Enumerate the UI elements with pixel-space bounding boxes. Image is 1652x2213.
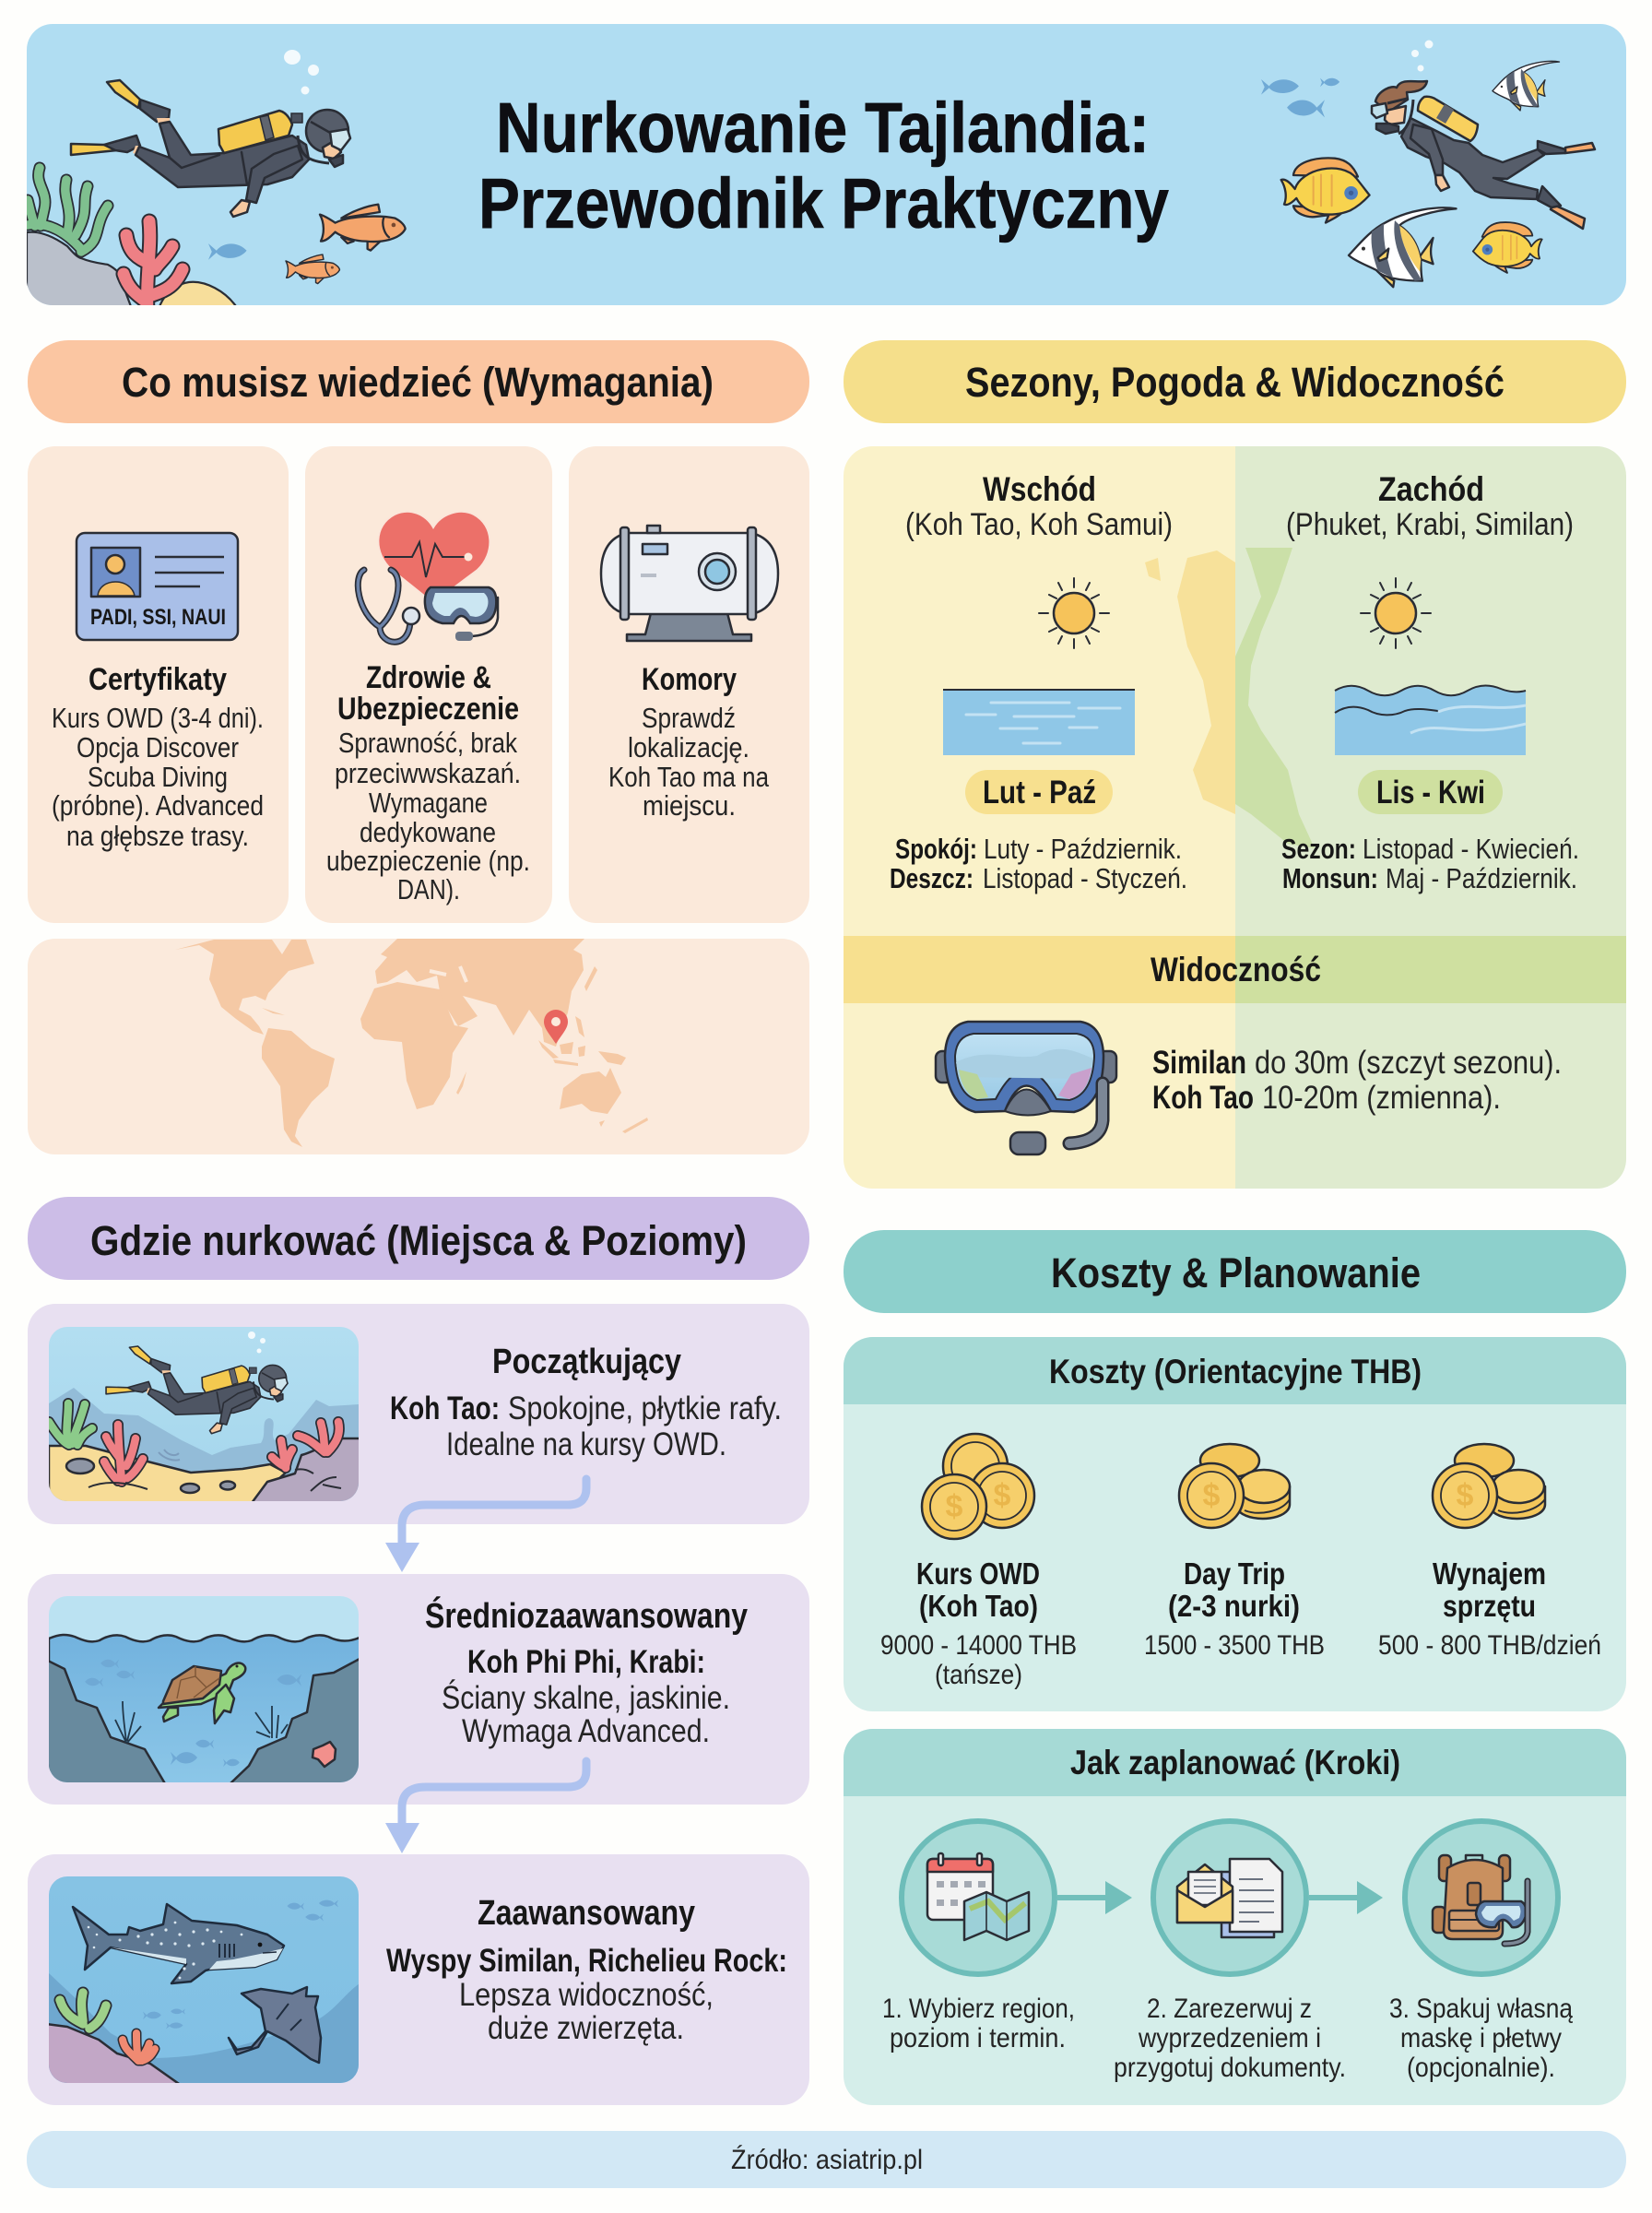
text: course cost: 9000 - 14000 THB [880,1630,1077,1661]
heading: where to dive: Gdzie nurkować (Miejsca & Poziomy) [90,1217,747,1264]
icon: coins day trip [1179,1444,1290,1528]
panel: certificates [28,446,289,923]
text: visibility: Koh Tao [1152,1080,1254,1116]
text: step 2: przygotuj dokumenty. [1114,2053,1346,2083]
text: day trip cost [1144,1556,1325,1661]
panel: seasons and visibility [844,446,1626,1189]
text: health: przeciwwskazań. [335,757,521,789]
badge: east season: Lut - Paź [983,775,1096,811]
text: visibility: Similan [1152,1045,1246,1081]
text: east details: Deszcz: [890,862,974,894]
text: advanced: Zaawansowany [478,1894,695,1933]
heading: costs and planning [844,1230,1626,1313]
text: certificates: Certyfikaty [88,662,227,697]
text: intermediate: Ściany skalne, jaskinie. [442,1679,730,1716]
icon: ID card [77,533,238,640]
icon: sun east [1039,578,1109,648]
text: step 1 [882,1994,1075,2053]
text: east: (Koh Tao, Koh Samui) [905,507,1173,542]
text: health: Wymagane [369,787,488,819]
text: visibility: do 30m (szczyt sezonu). [1255,1045,1562,1081]
text: beginner: Początkujący [492,1343,681,1381]
illustration: left reef and diver [27,41,1595,312]
text: chambers: miejscu. [643,789,736,822]
heading: where to dive [28,1197,809,1280]
text: step 1: 1. Wybierz region, [882,1994,1075,2024]
panel: planning steps [844,1729,1626,2105]
text: course cost: (tańsze) [935,1660,1022,1690]
text: certificates: Scuba Diving [88,761,228,793]
text: west: Zachód [1378,470,1484,508]
panel: advanced [28,1854,809,2105]
icon: step 2 envelope and documents [1153,1821,1306,1974]
text: west [1286,470,1574,542]
text: west details: Listopad - Kwiecień. [1363,833,1579,865]
text: rental cost: 500 - 800 THB/dzień [1378,1630,1601,1661]
text: certificates: (próbne). Advanced [52,789,264,822]
text: advanced: Lepsza widoczność, [459,1977,714,2013]
text: step 3: maskę i płetwy [1400,2023,1562,2053]
badge: west season: Lis - Kwi [1376,775,1485,811]
text: health: Zdrowie & [366,660,491,695]
panel: chambers [569,446,809,923]
icon: coins day trip: $ [1203,1478,1221,1513]
icon: header bubbles [284,41,1433,94]
icon: step 3 backpack and mask [1405,1821,1558,1974]
arrow: intermediate to advanced [385,1761,586,1853]
text: step 2 [1114,1994,1346,2083]
text: chambers: Sprawdź [642,702,736,734]
text: east details: Listopad - Styczeń. [983,862,1187,894]
icon: coins course: $ [994,1478,1011,1513]
text: step 3: (opcjonalnie). [1407,2053,1555,2083]
illustration: wall and turtle [46,1596,361,1785]
badge: west season [1358,770,1503,814]
header banner [27,24,1626,312]
text: visibility: 10-20m (zmienna). [1262,1080,1501,1116]
text: health: DAN). [397,873,460,905]
text: west details [1281,833,1579,894]
text: intermediate: Koh Phi Phi, Krabi: [467,1644,705,1680]
icon: coins course [922,1434,1034,1539]
arrow: step 2 to 3 [1309,1881,1383,1914]
text: west: (Phuket, Krabi, Similan) [1286,507,1574,542]
text: health: Sprawność, brak [338,727,517,759]
text: advanced: duże zwierzęta. [488,2010,684,2046]
panel: world map [28,939,809,1154]
heading: seasons [844,340,1626,423]
text: chambers: Komory [642,662,737,697]
text: step 3: 3. Spakuj własną [1389,1994,1573,2024]
text: intermediate: Średniozaawansowany [425,1595,748,1636]
illustration: shallow reef [49,1327,361,1503]
footer: source [27,2131,1626,2188]
heading: costs and planning: Koszty & Planowanie [1051,1249,1421,1296]
icon: coins rental [1433,1444,1545,1528]
text: course cost: (Koh Tao) [919,1589,1038,1623]
text: day trip cost: (2-3 nurki) [1168,1589,1300,1623]
heading: steps: Jak zaplanować (Kroki) [1070,1744,1400,1781]
heading: visibility: Widoczność [1150,951,1321,988]
illustration: calm water [943,689,1135,755]
text: rental cost: Wynajem [1433,1556,1546,1591]
icon: hyperbaric chamber [601,526,778,641]
text: advanced: Wyspy Similan, Richelieu Rock: [386,1943,787,1979]
text: beginner: Idealne na kursy OWD. [446,1426,726,1462]
icon: step 1 calendar and map [902,1821,1055,1974]
footer: source: Źródło: asiatrip.pl [731,2145,923,2175]
icon: ID card: PADI, SSI, NAUI [90,605,226,630]
text: health: ubezpieczenie (np. [326,845,530,877]
text: step 3 [1389,1994,1573,2083]
text: east details: Luty - Październik. [984,833,1182,865]
text: step 1: poziom i termin. [890,2023,1066,2053]
text: course cost [880,1556,1077,1690]
text: step 2: wyprzedzeniem i [1138,2023,1321,2053]
text: certificates [52,662,264,852]
text: certificates: Kurs OWD (3-4 dni). [52,702,264,734]
text: health [326,660,530,905]
text: intermediate: Wymaga Advanced. [462,1713,710,1749]
text: east details: Spokój: [895,833,977,865]
text: day trip cost: Day Trip [1184,1556,1285,1591]
text: east details [890,833,1187,894]
heading: requirements [28,340,809,423]
panel: health [305,446,552,923]
text: chambers: lokalizację. [628,731,749,763]
text: beginner: Spokojne, płytkie rafy. [508,1391,782,1426]
heading: seasons: Sezony, Pogoda & Widoczność [965,359,1504,406]
panel: costs [844,1337,1626,1711]
arrow: step 1 to 2 [1057,1881,1132,1914]
icon: sun west [1361,578,1431,648]
text: rental cost [1378,1556,1601,1661]
title [478,89,1169,243]
text: east [905,470,1173,542]
illustration: whale shark and manta [46,1876,361,2086]
text: health: dedykowane [360,816,496,848]
heading: costs: Koszty (Orientacyjne THB) [1049,1353,1422,1391]
icon: location pin [544,1010,568,1044]
text: health: Ubezpieczenie [337,692,519,727]
badge: east season [965,770,1113,814]
text: visibility [1152,1045,1562,1116]
panel: intermediate [28,1574,809,1805]
icon: coins rental: $ [1457,1478,1474,1513]
icon: coins course: $ [946,1489,963,1524]
text: chambers [608,662,770,822]
text: certificates: na głębsze trasy. [66,820,249,852]
text: day trip cost: 1500 - 3500 THB [1144,1630,1325,1661]
illustration: right fish and diver [1261,79,1299,95]
text: advanced [386,1894,787,2046]
text: west details: Sezon: [1281,833,1356,865]
title: Nurkowanie Tajlandia: [496,89,1150,168]
heading: requirements: Co musisz wiedzieć (Wymagania) [122,359,714,406]
text: east: Wschód [983,470,1096,508]
title: Przewodnik Praktyczny [478,164,1169,243]
text: certificates: Opcja Discover [77,731,239,763]
panel: beginner [28,1304,809,1524]
text: west details: Maj - Październik. [1386,862,1577,894]
icon: heart, stethoscope and mask [358,512,498,642]
text: step 2: 2. Zarezerwuj z [1147,1994,1312,2024]
arrow: beginner to intermediate [385,1479,586,1572]
text: beginner: Koh Tao: [390,1391,500,1426]
illustration: wavy water [1335,685,1526,755]
text: west details: Monsun: [1282,862,1378,894]
icon: dive mask [936,1022,1116,1154]
text: intermediate [425,1595,748,1749]
text: beginner [390,1343,782,1462]
text: rental cost: sprzętu [1443,1589,1536,1623]
text: chambers: Koh Tao ma na [608,761,770,793]
text: course cost: Kurs OWD [916,1556,1040,1591]
